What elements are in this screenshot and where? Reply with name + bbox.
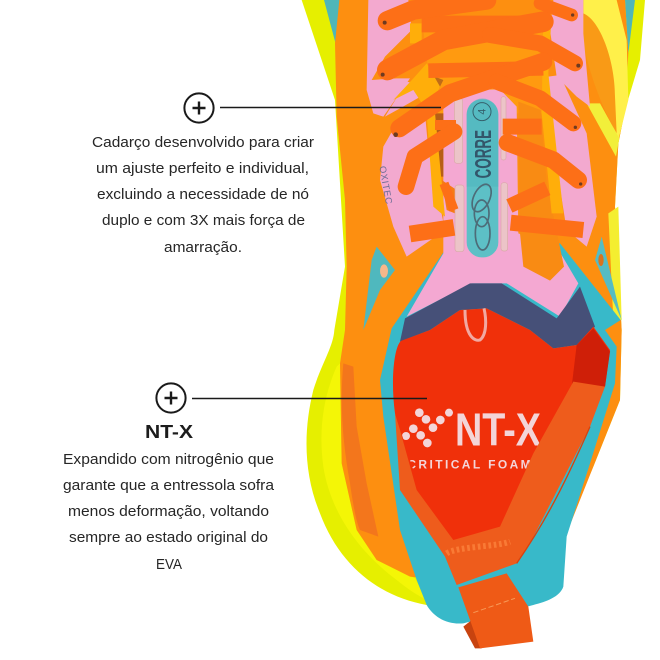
- NT-X insole logo: NT-X: [455, 404, 541, 456]
- callout: laces: [92, 93, 441, 256]
- shoe illustration: [302, 0, 645, 648]
- teal tag: CORRE 4 logo: 4: [476, 109, 488, 115]
- teal upper side accents: [324, 0, 635, 53]
- sole: neon yellow midsole: [302, 0, 645, 605]
- leader line: laces: [220, 106, 441, 108]
- teal tag: CORRE 4 logo: CORRE: [470, 130, 496, 178]
- NT-X insole logo: CRITICAL FOAM: [407, 458, 531, 472]
- pink tongue panel: [407, 89, 578, 317]
- shoelaces: [387, 0, 583, 234]
- leader line: NT-X: [192, 398, 427, 400]
- text: laces description: amarração.: [164, 240, 242, 256]
- tongue: orange knit top: [422, 17, 543, 113]
- darker orange heel texture: [342, 363, 378, 537]
- yellow-orange eyestay bands: [393, 13, 563, 217]
- lace guide loops: [454, 97, 508, 252]
- pull tab: [458, 573, 533, 648]
- plus icon: laces: [184, 93, 214, 123]
- text: laces description: excluindo a necessidade de nó: [97, 187, 309, 203]
- text: laces description: um ajuste perfeito e individual,: [96, 161, 309, 177]
- text: NT-X description: EVA: [156, 557, 182, 573]
- text: NT-X description: Expandido com nitrogênio que: [63, 452, 274, 468]
- text: NT-X description: menos deformação, voltando: [68, 504, 269, 520]
- lace eyelets: [381, 13, 582, 186]
- text: laces description: duplo e com 3X mais força de: [102, 213, 305, 229]
- NT-X insole logo: [402, 408, 540, 468]
- text: NT-X description: garante que a entressola sofra: [63, 478, 275, 494]
- red insole: [393, 308, 610, 547]
- orange heel lining: [395, 382, 605, 585]
- side teal vent patches: [363, 237, 622, 330]
- OXITEC mark: OXITEC: [377, 165, 394, 205]
- heel outer teal collar: [380, 243, 621, 624]
- callout: NT-X: [63, 383, 427, 573]
- dark red interior on the right: [572, 328, 610, 387]
- heading: NT-X: NT-X: [145, 421, 194, 442]
- navy collar lining: [400, 283, 595, 348]
- pink eyestay panels: [367, 0, 597, 257]
- text: NT-X description: sempre ao estado original do: [69, 530, 268, 546]
- plus icon: NT-X: [156, 383, 186, 413]
- text: NT-X description: [63, 452, 275, 573]
- tongue: orange knit sides: [427, 73, 564, 281]
- text: laces description: [92, 135, 314, 256]
- text: laces description: Cadarço desenvolvido para criar: [92, 135, 314, 151]
- right side yellow stripes: [583, 0, 628, 320]
- insole ring logo fragment: [465, 308, 486, 340]
- orange knit upper: [335, 0, 628, 580]
- teal tag: CORRE 4 logo: [467, 98, 498, 257]
